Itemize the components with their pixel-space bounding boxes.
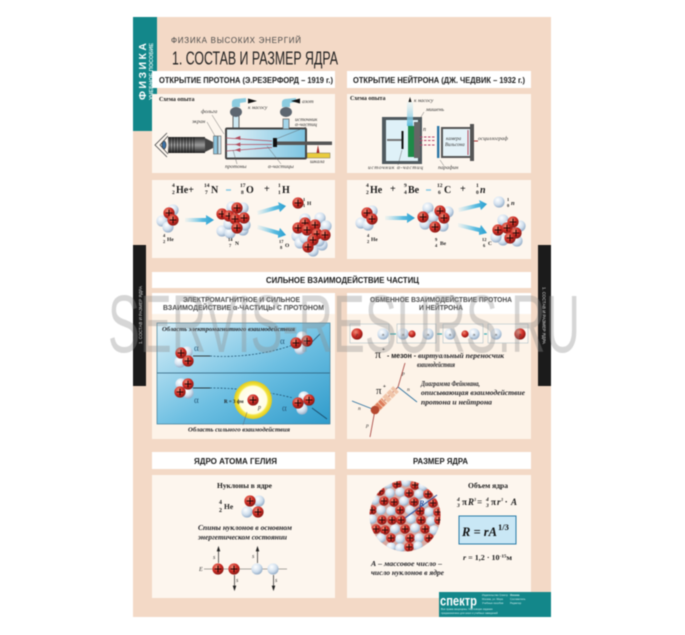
scheme labels: к насосу — [414, 98, 434, 104]
arrow — [385, 213, 415, 223]
volume formula: r — [497, 497, 501, 507]
vacuum chamber — [226, 98, 306, 158]
publisher block: спектр — [440, 592, 477, 608]
Feynman caption: Диаграмма Фейнмана, — [420, 380, 480, 388]
spins caption — [197, 524, 292, 542]
isotope label C: C — [488, 241, 492, 247]
volume formula: 4 — [485, 497, 489, 503]
alpha rays — [226, 136, 272, 152]
scheme labels: парафин — [438, 164, 459, 171]
N nucleus — [216, 201, 251, 239]
isotope label C: 12 — [482, 237, 487, 242]
panel: nucleus size — [347, 475, 531, 598]
panel: Rutherford experiment scheme: Схема опыта — [159, 97, 195, 103]
equation: + — [460, 184, 466, 195]
exchange sequence: n — [382, 332, 385, 337]
Feynman diagram: π — [376, 385, 382, 397]
subheading: И НЕЙТРОНА — [419, 303, 463, 312]
equation: 0 — [476, 190, 479, 196]
subheading — [347, 293, 531, 314]
EM scattering: α — [194, 343, 199, 353]
source rod and scale — [273, 138, 332, 158]
scheme labels: источник α-частиц — [368, 165, 423, 171]
equation — [366, 183, 486, 196]
caption: EM region: Область электромагнитного взаимодействия — [162, 326, 295, 333]
arrow down — [257, 225, 286, 238]
panel: helium nucleus — [152, 475, 335, 598]
panel: exchange interaction — [347, 293, 531, 439]
screen and foil — [214, 136, 221, 154]
isotope label He: He — [371, 237, 378, 243]
He nucleus — [241, 495, 265, 518]
H nucleus — [292, 197, 304, 209]
Feynman caption: протона и нейтрона — [421, 398, 493, 406]
mass number caption — [370, 560, 444, 577]
equation: O — [246, 185, 254, 196]
main title: 1. СОСТАВ И РАЗМЕР ЯДРА — [172, 48, 338, 68]
pion caption — [375, 347, 504, 369]
strong scattering — [174, 378, 327, 425]
volume formula: 3 — [473, 497, 476, 502]
neutron — [493, 196, 505, 208]
publisher block: Физика — [510, 593, 520, 597]
spin diagram: s — [275, 578, 278, 584]
exchange sequence: n — [473, 332, 476, 337]
icon: eye — [155, 133, 168, 157]
pion caption: + — [382, 347, 385, 353]
strong force region: R = 3 фм — [224, 400, 244, 405]
isotope label He: He — [167, 237, 174, 243]
equation: 4 — [172, 183, 175, 189]
radius formula box: R = rA — [461, 524, 497, 539]
isotope label He — [163, 233, 174, 244]
heading: strong interaction: СИЛЬНОЕ ВЗАИМОДЕЙСТВИЕ ЧАСТИЦ — [266, 276, 419, 285]
spin diagram: s — [252, 554, 255, 560]
exchange sequence: n — [495, 332, 498, 337]
publisher block — [439, 592, 551, 617]
leader lines — [207, 115, 306, 164]
publisher block: Учебные пособия — [482, 601, 504, 605]
heading: neutron discovery: ОТКРЫТИЕ НЕЙТРОНА (ДЖ. ЧЕДВИК – 1932 г.) — [353, 76, 525, 85]
equation: n — [480, 185, 486, 196]
panel: proton reaction — [152, 180, 335, 258]
heading: helium nucleus: ЯДРО АТОМА ГЕЛИЯ — [194, 457, 277, 466]
equation: 9 — [404, 183, 407, 189]
isotope label H: H — [307, 201, 312, 207]
pion caption: взаимодействия — [417, 361, 455, 369]
side tab left — [133, 245, 146, 386]
panel: neutron reaction — [347, 180, 531, 259]
scheme labels: осциллограф — [478, 135, 508, 142]
volume formula: Объем ядра — [468, 482, 509, 490]
publisher block: Все права защищены. Настоящее издание — [441, 607, 493, 611]
teal subject tab — [133, 17, 157, 131]
blue field — [157, 323, 330, 424]
arrow — [185, 215, 214, 225]
equation: 2 — [172, 190, 175, 196]
Be nucleus — [417, 202, 454, 233]
exchange sequence: p — [518, 332, 522, 337]
arrow up — [458, 200, 487, 212]
equation: C — [444, 185, 451, 196]
volume formula: R — [467, 497, 474, 507]
isotope label He: 4 — [163, 233, 166, 238]
equation: 4 — [366, 183, 369, 189]
volume formula: π — [491, 497, 496, 507]
equation: 14 — [204, 183, 210, 189]
scheme labels: мишень — [425, 107, 445, 113]
mass number caption: число нуклонов в ядре — [371, 569, 444, 577]
isotope label N: 7 — [229, 243, 232, 248]
isotope label Be: 9 — [435, 237, 438, 242]
equation: + — [264, 184, 270, 195]
spin diagram — [198, 547, 287, 590]
strong force region — [224, 381, 272, 425]
equation: 1 — [278, 190, 281, 196]
radius constant: r = 1,2 · 10 — [463, 554, 495, 562]
strong scattering: α — [282, 403, 287, 413]
Feynman diagram: n — [407, 387, 410, 393]
Wilson chamber — [442, 124, 478, 161]
isotope label n — [507, 197, 515, 208]
He symbol: 2 — [219, 508, 222, 514]
publisher block: Редактор — [510, 601, 522, 605]
heading: proton discovery — [152, 71, 335, 88]
subheading: ОБМЕННОЕ ВЗАИМОДЕЙСТВИЕ ПРОТОНА — [370, 295, 512, 304]
mass number caption: А – массовое число – — [370, 560, 443, 568]
panel: helium nucleus: Нуклоны в ядре — [217, 482, 272, 490]
EM scattering — [174, 331, 320, 368]
equation: 7 — [205, 190, 208, 196]
volume formula: 3 — [500, 497, 503, 502]
equation: 8 — [241, 190, 244, 196]
teal subject tab: УЧЕБНОЕ ПОСОБИЕ — [149, 42, 155, 100]
arrow up — [257, 202, 286, 215]
isotope label He: 2 — [367, 239, 370, 244]
radius formula box: 1/3 — [498, 522, 509, 532]
volume formula: = — [477, 497, 482, 507]
neutron rays — [420, 137, 435, 145]
scheme labels: шкала — [310, 159, 325, 165]
isotope label Be: 4 — [435, 243, 438, 248]
volume formula: A — [510, 497, 517, 507]
series title: ФИЗИКА ВЫСОКИХ ЭНЕРГИЙ — [171, 36, 301, 45]
equation: + — [390, 184, 396, 195]
spin diagram: E — [198, 567, 203, 573]
isotope label O: 8 — [280, 245, 283, 250]
source chamber — [382, 97, 422, 164]
Feynman caption: описывающая взаимодействие — [421, 389, 525, 397]
Feynman caption — [420, 380, 525, 406]
equation: 17 — [240, 183, 246, 189]
isotope label O: O — [285, 243, 290, 249]
scheme labels: источник — [295, 117, 318, 123]
poster background — [133, 17, 551, 617]
isotope label H — [303, 197, 312, 208]
exchange sequence — [350, 324, 528, 343]
nucleus sphere: R — [418, 499, 425, 508]
radius constant: м — [506, 554, 512, 562]
equation: He — [370, 185, 383, 196]
panel: Chadwick experiment scheme — [347, 94, 531, 173]
isotope label N: 14 — [228, 237, 233, 242]
publisher block: Издательство Спектр — [482, 593, 508, 597]
He symbol — [219, 500, 234, 514]
caption: strong region: Область сильного взаимодействия — [188, 426, 290, 434]
pion caption: - мезон - — [387, 351, 416, 360]
subheading: ВЗАИМОДЕЙСТВИЕ α-ЧАСТИЦЫ С ПРОТОНОМ — [163, 303, 324, 312]
equation: 12 — [437, 183, 443, 189]
equation: 4 — [404, 190, 407, 196]
heading: neutron discovery — [347, 71, 531, 88]
heading: nucleus size — [347, 452, 531, 469]
isotope label Be — [435, 237, 447, 248]
isotope label N: N — [235, 241, 239, 247]
exchange sequence: n — [427, 332, 430, 337]
spins caption: Спины нуклонов в основном — [198, 524, 292, 532]
publisher block: Составитель — [510, 597, 526, 601]
Feynman diagram — [352, 363, 417, 437]
pion caption: π — [375, 347, 381, 361]
side tab right: 1. СОСТАВ И РАЗМЕР ЯДРА — [542, 287, 546, 344]
scheme labels: α-частиц — [295, 122, 317, 128]
scheme labels — [368, 98, 508, 171]
radius formula box — [459, 516, 516, 544]
publisher block: предназначено для школ и учебных заведений — [441, 611, 498, 615]
nucleus sphere — [367, 477, 444, 553]
scheme labels: экран — [192, 119, 205, 125]
isotope label H: 1 — [303, 197, 306, 202]
isotope label O — [279, 239, 290, 250]
equation: Be — [408, 185, 420, 196]
Feynman diagram: n — [358, 406, 361, 412]
isotope label He: 4 — [367, 233, 370, 238]
scheme labels: фольга — [201, 108, 217, 115]
exchange sequence: p — [355, 332, 359, 337]
arrow down — [458, 223, 487, 235]
He symbol: He — [224, 502, 234, 511]
spin diagram: s — [213, 555, 216, 561]
scheme labels: n — [423, 127, 426, 133]
isotope label n: n — [511, 200, 515, 207]
isotope label C: 6 — [483, 243, 486, 248]
microscope — [168, 137, 213, 153]
volume formula: 3 — [485, 503, 489, 509]
equation: N — [211, 185, 219, 196]
teal subject tab: ФИЗИКА — [137, 43, 149, 100]
spin diagram: s — [236, 578, 239, 584]
equation: He+ — [176, 185, 194, 196]
equation: 1 — [476, 183, 479, 189]
scheme labels: α-частицы — [268, 164, 294, 170]
EM scattering: α — [280, 336, 285, 346]
pion caption: виртуальный переносчик — [418, 352, 504, 360]
side tab right — [538, 245, 551, 386]
isotope label Be: Be — [440, 241, 447, 247]
equation: 2 — [366, 190, 369, 196]
scheme labels: азот — [302, 99, 314, 105]
panel: Rutherford experiment scheme — [152, 94, 335, 173]
isotope label H: 1 — [303, 203, 306, 208]
volume formula: π — [462, 497, 467, 507]
strong force region: p — [257, 405, 261, 411]
isotope label O: 17 — [279, 239, 284, 244]
He nucleus — [355, 205, 378, 231]
heading: strong interaction — [152, 272, 531, 288]
paraffin plate — [437, 126, 439, 158]
He nucleus — [156, 204, 179, 233]
side tab left: 1. СОСТАВ И РАЗМЕР ЯДРА — [138, 286, 143, 344]
spins caption: энергетическом состоянии — [197, 534, 287, 542]
radius constant — [463, 554, 512, 562]
volume formula: 4 — [456, 497, 460, 503]
subheading: ЭЛЕКТРОМАГНИТНОЕ И СИЛЬНОЕ — [183, 297, 300, 304]
radius constant: -15 — [500, 554, 507, 558]
panel: Chadwick experiment scheme: Схема опыта — [350, 96, 386, 102]
Feynman diagram: + — [383, 384, 386, 390]
exchange sequence: n — [402, 332, 405, 337]
Feynman diagram: p — [401, 371, 405, 377]
O nucleus — [291, 212, 332, 257]
volume formula: · — [505, 497, 507, 507]
heading: proton discovery: ОТКРЫТИЕ ПРОТОНА (Э.РЕЗЕРФОРД – 1919 г.) — [159, 76, 333, 85]
exchange sequence: n — [449, 332, 452, 337]
isotope label N — [228, 237, 239, 248]
heading: nucleus size: РАЗМЕР ЯДРА — [413, 457, 468, 466]
He symbol: 4 — [219, 500, 222, 506]
isotope label He: 2 — [163, 239, 166, 244]
scheme labels: протоны — [225, 164, 247, 170]
strong scattering: α — [194, 395, 199, 405]
publisher block: Москва, ул. Мира — [482, 597, 504, 601]
volume formula — [456, 482, 517, 509]
scheme labels: Вильсона — [445, 143, 465, 148]
equation — [172, 183, 290, 196]
subheading — [152, 293, 335, 314]
scheme labels: к насосу — [248, 105, 268, 111]
heading: helium nucleus — [152, 452, 335, 469]
scheme labels: камера — [446, 137, 462, 142]
isotope label n: 0 — [507, 203, 510, 208]
equation: H — [282, 185, 290, 196]
scheme labels — [192, 99, 325, 170]
C nucleus — [490, 214, 526, 247]
equation: 6 — [438, 190, 441, 196]
isotope label He — [367, 233, 378, 244]
isotope label C — [482, 237, 492, 248]
panel: electromagnetic and strong interaction — [152, 293, 335, 439]
volume formula: 3 — [456, 503, 460, 509]
equation: 1 — [278, 183, 281, 189]
isotope label n: 1 — [507, 197, 510, 202]
Feynman diagram: p — [365, 423, 369, 429]
